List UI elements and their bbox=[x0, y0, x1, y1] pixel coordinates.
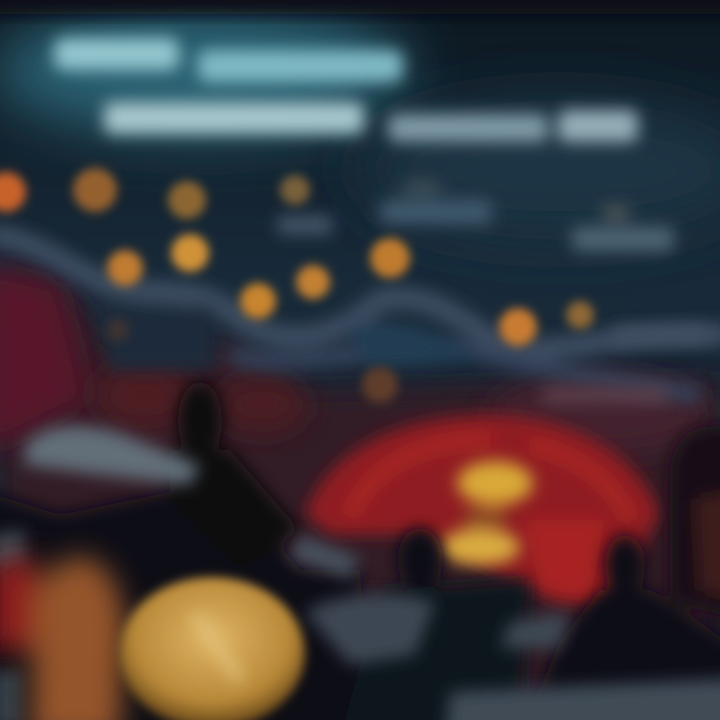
chart: red arc dome bbox=[305, 415, 660, 605]
gold stacks bbox=[440, 461, 533, 565]
red and orange glow at lower left bbox=[0, 555, 125, 720]
title bbox=[54, 38, 638, 142]
light grey highlights bbox=[0, 426, 720, 720]
chart: wavy market line bbox=[0, 235, 720, 395]
market points: orange dots bbox=[0, 168, 594, 403]
label blocks bbox=[277, 182, 708, 403]
icon: gold coin bbox=[119, 577, 305, 720]
silhouettes: foreground crowd bbox=[0, 382, 720, 720]
panel: red lower field bbox=[0, 260, 720, 720]
